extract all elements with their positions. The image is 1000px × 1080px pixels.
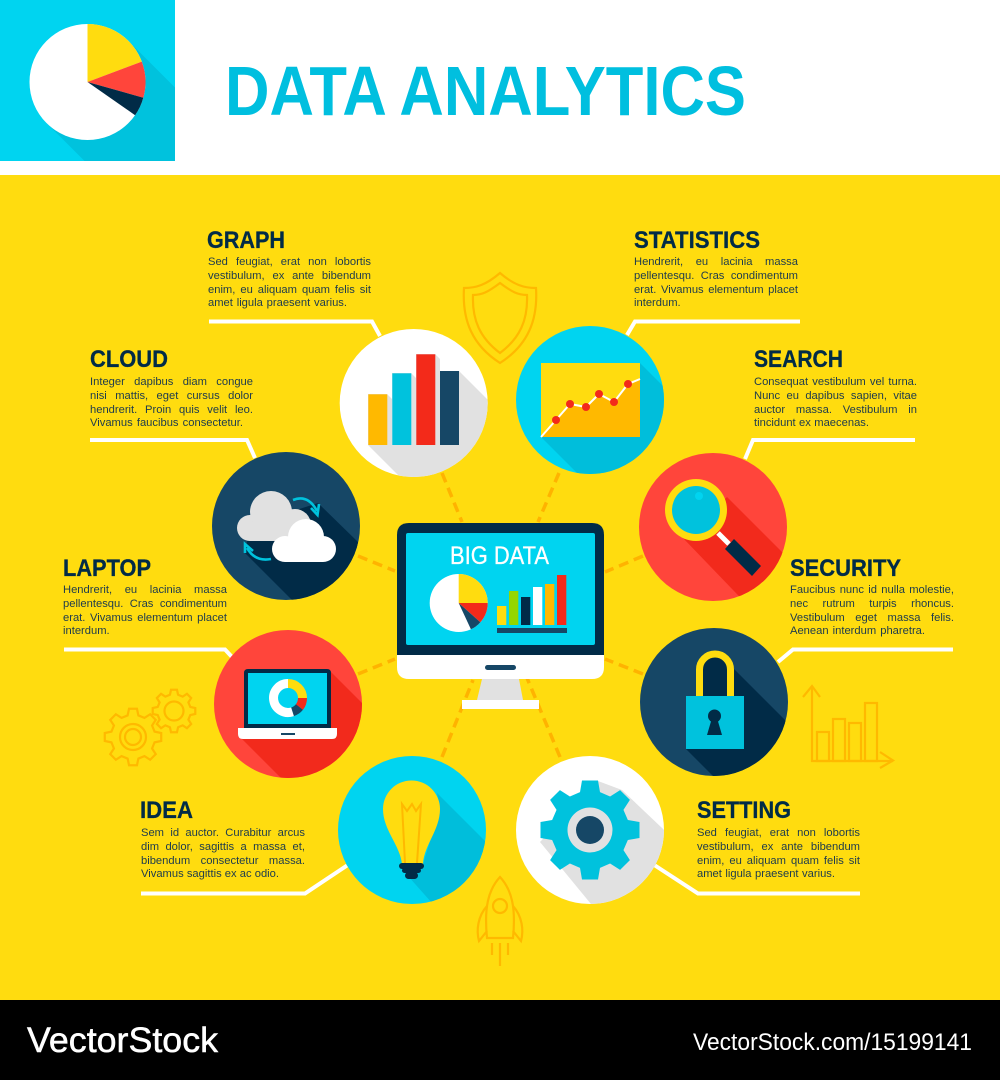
central monitor: big data <box>397 523 604 709</box>
dashed connectors <box>358 473 643 757</box>
text block: statistics: pellentesqu. Cras condimentum <box>634 270 798 282</box>
icon: bar graph <box>340 329 488 477</box>
text block: setting: enim, eu aliquam quam felis sit <box>697 855 860 867</box>
connector: laptop <box>64 650 232 657</box>
text block: idea: Sem id auctor. Curabitur arcus <box>141 827 305 839</box>
icon: light bulb <box>338 756 486 904</box>
heading: security: SECURITY <box>790 555 901 582</box>
panel: cloud <box>90 350 360 600</box>
heading: cloud: CLOUD <box>90 346 168 373</box>
connector: search <box>745 440 915 459</box>
decorative icon: gears <box>105 690 195 765</box>
text block: cloud: nisi mattis, eget cursus dolor <box>90 390 253 402</box>
panel: idea <box>141 756 486 904</box>
icon: laptop <box>214 630 362 778</box>
text block: security: nec rutrum turpis rhoncus. <box>790 598 954 610</box>
text block: graph: amet ligula praesent varius. <box>208 297 347 309</box>
icon: padlock <box>640 628 788 776</box>
panel: security <box>640 555 955 790</box>
heading: laptop: LAPTOP <box>63 555 151 582</box>
text block: idea: Vivamus sagittis ex ac odio. <box>141 868 279 880</box>
screen bar chart <box>497 575 567 633</box>
text block: statistics <box>634 256 799 311</box>
text block: setting <box>697 827 861 882</box>
screen heading: BIG DATA <box>450 542 549 570</box>
panel: search <box>639 350 916 601</box>
icon: clouds <box>212 452 360 600</box>
icon: line chart <box>516 326 664 474</box>
heading: statistics: STATISTICS <box>634 227 760 254</box>
decorative icon: bar chart outline <box>803 686 893 768</box>
heading: setting: SETTING <box>697 797 791 824</box>
text block: setting: vestibulum, ex ante bibendum <box>697 841 860 853</box>
text block: search: tincidunt ex maecenas. <box>754 417 869 429</box>
text block: laptop: erat. Vivamus elementum placet <box>63 612 227 624</box>
text block: setting: Sed feugiat, erat non lobortis <box>697 827 860 839</box>
heading: graph: GRAPH <box>207 227 285 254</box>
panel: statistics <box>516 231 800 474</box>
text block: search: auctor massa. Vestibulum in <box>754 404 917 416</box>
text block: cloud: Integer dapibus diam congue <box>90 376 253 388</box>
text block: graph: enim, eu aliquam quam felis sit <box>208 284 371 296</box>
footer brand: VectorStock <box>27 1021 219 1060</box>
text block: laptop: interdum. <box>63 625 110 637</box>
connector: idea <box>141 866 347 894</box>
heading: idea: IDEA <box>140 797 193 824</box>
icon: magnifying glass <box>639 453 787 601</box>
monitor stand <box>462 679 539 709</box>
yellow background panel <box>0 175 1000 1000</box>
decorative icon: rocket <box>478 877 522 966</box>
text block: graph: Sed feugiat, erat non lobortis <box>208 256 371 268</box>
connector: statistics <box>627 322 800 335</box>
connector: graph <box>209 322 380 336</box>
panel: graph <box>208 231 488 477</box>
text block: graph <box>208 256 372 311</box>
text block: idea <box>141 827 306 882</box>
text block: laptop <box>63 584 228 639</box>
text block: statistics: erat. Vivamus elementum placet <box>634 284 798 296</box>
text block: security: Aenean interdum pharetra. <box>790 625 925 637</box>
text block: setting: amet ligula praesent varius. <box>697 868 835 880</box>
connector: cloud <box>90 440 255 458</box>
text block: laptop: Hendrerit, eu lacinia massa <box>63 584 227 596</box>
decorative icon: shield <box>464 273 536 363</box>
text block: cloud: hendrerit. Proin quis velit leo. <box>90 404 253 416</box>
text block: security: Vestibulum eget massa felis. <box>790 612 954 624</box>
text block: search: Nunc eu dapibus sapien, vitae <box>754 390 917 402</box>
text block: graph: vestibulum, ex ante bibendum <box>208 270 371 282</box>
footer bar <box>0 1000 1000 1080</box>
text block: cloud <box>90 376 254 431</box>
text block: security <box>790 584 955 639</box>
footer url: VectorStock.com/15199141 <box>693 1029 972 1056</box>
text block: cloud: Vivamus faucibus consectetur. <box>90 417 243 429</box>
text block: statistics: Hendrerit, eu lacinia massa <box>634 256 798 268</box>
text block: idea: dim dolor, sagittis a massa et, <box>141 841 305 853</box>
text block: search: Consequat vestibulum vel turna. <box>754 376 917 388</box>
title: DATA ANALYTICS <box>225 52 746 130</box>
icon: gear <box>516 756 664 904</box>
connector: setting <box>655 866 860 894</box>
text block: idea: bibendum consectetur massa. <box>141 855 305 867</box>
text block: statistics: interdum. <box>634 297 681 309</box>
text block: search <box>754 376 918 431</box>
panel: laptop <box>64 559 362 778</box>
panel: setting <box>516 756 861 915</box>
text block: laptop: pellentesqu. Cras condimentum <box>63 598 227 610</box>
connector: security <box>778 650 953 662</box>
text block: security: Faucibus nunc id nulla molestie, <box>790 584 954 596</box>
monitor body <box>397 523 604 679</box>
screen pie chart <box>430 574 488 632</box>
heading: search: SEARCH <box>754 346 843 373</box>
header icon: pie chart <box>0 0 175 161</box>
